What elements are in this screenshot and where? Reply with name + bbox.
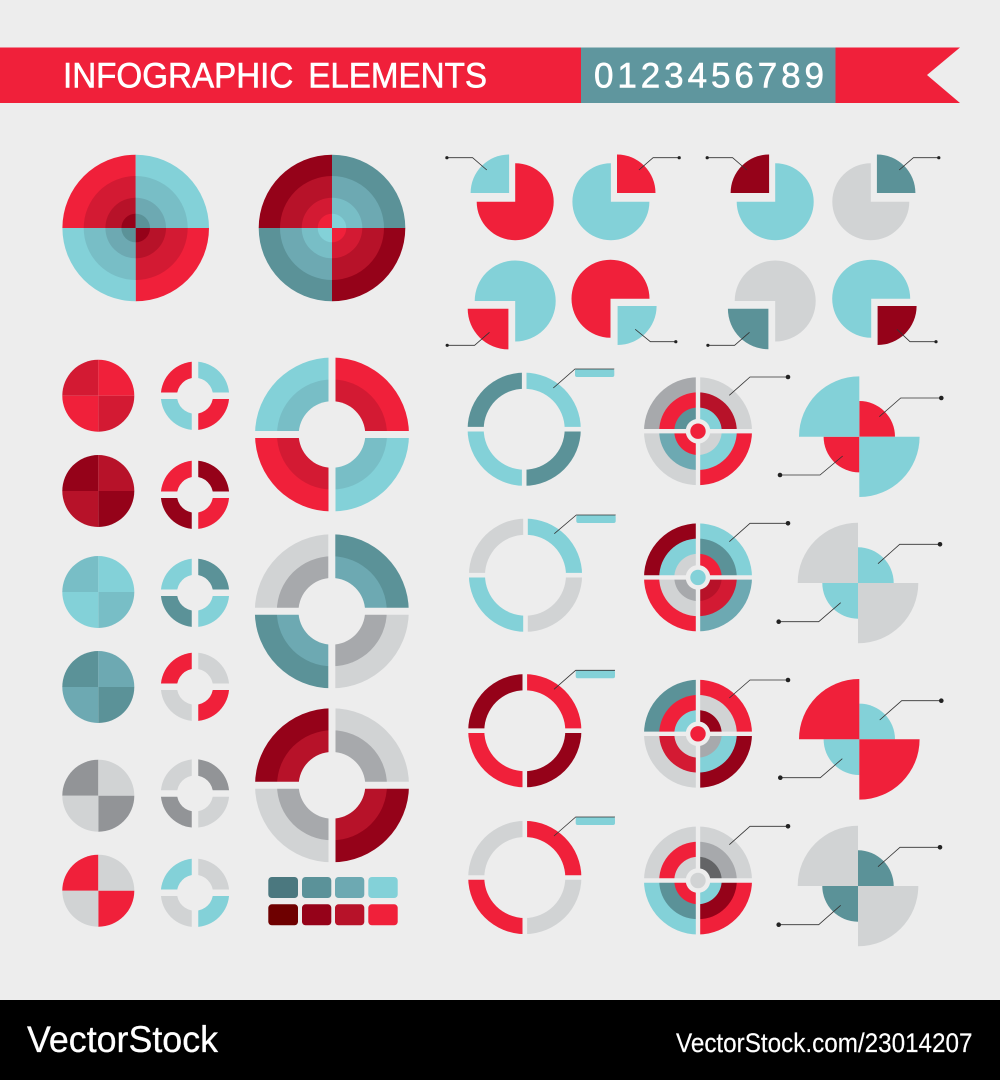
large donut: teal and red bbox=[252, 354, 412, 514]
leader line bbox=[554, 670, 615, 689]
numbers: 0123456789 bbox=[594, 56, 824, 95]
colour swatches bbox=[268, 877, 398, 925]
target ring 4 with gray centre bbox=[641, 824, 790, 938]
solid circle: grays bbox=[62, 760, 134, 832]
solid circle: teals bbox=[62, 556, 134, 628]
leader line bbox=[897, 329, 938, 343]
pie 6: red with teal slice bbox=[572, 260, 677, 345]
ring with label: gray and teal bbox=[466, 515, 616, 635]
title banner bbox=[0, 48, 960, 103]
leader line bbox=[706, 332, 750, 347]
small ring: teal and dark teal bbox=[159, 557, 231, 629]
ring with label: gray and red bbox=[465, 817, 615, 938]
leader line bbox=[899, 156, 940, 170]
label bar bbox=[575, 369, 614, 377]
leader line bbox=[706, 156, 747, 170]
small ring: teal and gray bbox=[159, 857, 231, 929]
leader line bbox=[445, 156, 487, 170]
solid circle: dark reds bbox=[62, 455, 134, 527]
ribbon bbox=[0, 48, 960, 103]
leader line bbox=[553, 369, 614, 388]
brand wordmark: VectorStock bbox=[27, 1019, 218, 1060]
pie 1: red with teal slice bbox=[445, 154, 554, 240]
target ring 2 with teal centre bbox=[641, 520, 790, 634]
large donut: dark red and gray bbox=[252, 705, 412, 865]
ring with label: dark teal and teal bbox=[464, 369, 614, 489]
label bar bbox=[576, 515, 616, 523]
leader line bbox=[729, 375, 790, 395]
leader line top bbox=[878, 542, 942, 564]
solid circle: red and gray bbox=[62, 855, 134, 927]
solid circle: reds bbox=[62, 360, 134, 432]
leader line bbox=[639, 156, 681, 170]
leader line bottom bbox=[778, 456, 843, 477]
large target chart: dark red and dark teal bbox=[259, 155, 405, 301]
pie 2: teal with red slice bbox=[572, 154, 681, 240]
pie 4: gray with dark teal slice bbox=[832, 154, 940, 240]
petal chart 3: red and teal bbox=[778, 679, 944, 800]
pie 5: teal with red slice bbox=[446, 260, 556, 349]
target ring 1 with red centre bbox=[641, 374, 790, 488]
small ring: red and gray bbox=[159, 651, 231, 723]
small ring: red and teal bbox=[159, 360, 231, 432]
petal chart 1: teal and red bbox=[778, 376, 944, 497]
target ring 3 with red centre bbox=[641, 677, 790, 791]
small ring: grays bbox=[159, 758, 231, 830]
small ring: red and dark red bbox=[159, 459, 231, 531]
leader line bottom bbox=[776, 905, 841, 927]
petal chart 4: gray and dark teal bbox=[776, 826, 942, 946]
leader line top bbox=[878, 845, 942, 867]
leader line bbox=[554, 515, 616, 534]
leader line bbox=[729, 678, 790, 698]
leader line bbox=[554, 817, 615, 836]
leader line bbox=[729, 824, 790, 845]
leader line top bbox=[880, 698, 944, 720]
solid circle: dark teals bbox=[62, 651, 134, 723]
leader line bbox=[729, 521, 790, 542]
leader line bbox=[635, 329, 677, 343]
footer bar bbox=[0, 1000, 1000, 1080]
leader line bottom bbox=[776, 603, 841, 624]
title: INFOGRAPHIC ELEMENTS bbox=[63, 56, 487, 95]
large donut: gray and dark teal bbox=[252, 531, 412, 691]
label bar bbox=[576, 817, 615, 825]
petal chart 2: gray and teal bbox=[776, 523, 942, 643]
leader line bottom bbox=[778, 759, 842, 780]
pie 3: teal with dark red slice bbox=[706, 154, 814, 240]
label bar bbox=[576, 670, 615, 678]
large target chart: red and teal bbox=[62, 155, 209, 301]
image reference: VectorStock.com/23014207 bbox=[676, 1028, 972, 1058]
ring with label: dark red and red bbox=[465, 670, 615, 791]
pie 7: gray with dark teal slice bbox=[706, 260, 816, 349]
leader line top bbox=[879, 396, 944, 417]
number panel bbox=[581, 48, 836, 103]
leader line bbox=[446, 332, 490, 347]
pie 8: teal with dark red slice bbox=[832, 260, 938, 345]
